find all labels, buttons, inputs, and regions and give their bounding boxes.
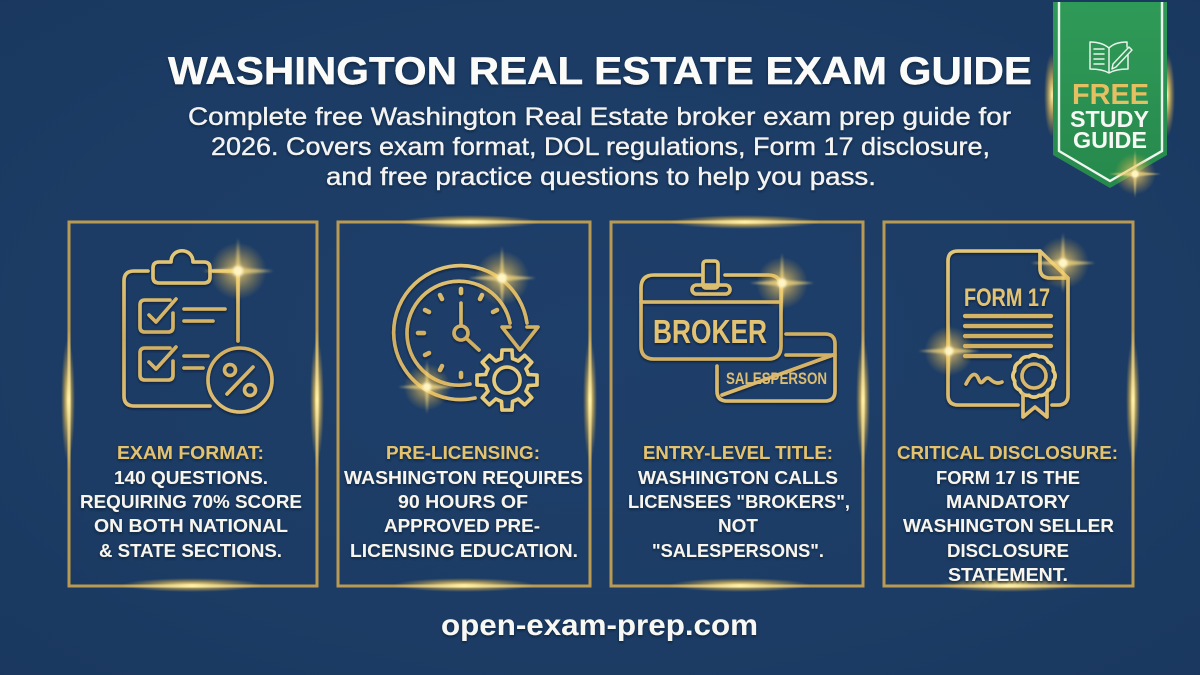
text: critical disclosure: DISCLOSURE bbox=[947, 540, 1069, 561]
subtitle bbox=[188, 103, 1011, 191]
text: pre-licensing: WASHINGTON REQUIRES bbox=[344, 467, 583, 488]
text: entry-level title: ENTRY-LEVEL TITLE: bbox=[643, 442, 833, 463]
text: pre-licensing bbox=[344, 442, 583, 561]
text: pre-licensing: APPROVED PRE- bbox=[384, 515, 540, 536]
badge: free study guide: GUIDE bbox=[1073, 127, 1147, 153]
text: entry-level title: NOT bbox=[718, 515, 759, 536]
footer url: open-exam-prep.com bbox=[441, 609, 758, 642]
panel: entry-level title bbox=[611, 215, 870, 592]
text: entry-level title: WASHINGTON CALLS bbox=[638, 467, 838, 488]
icon: clipboard with percent bbox=[124, 251, 272, 412]
icon: clock with arrow and gear bbox=[394, 266, 538, 410]
badge: free study guide: FREE bbox=[1072, 79, 1149, 111]
text: exam format: EXAM FORMAT: bbox=[117, 442, 264, 463]
text: critical disclosure: CRITICAL DISCLOSURE: bbox=[897, 442, 1118, 463]
text: critical disclosure: STATEMENT. bbox=[948, 564, 1068, 585]
icon: broker badge and struck salesperson card bbox=[641, 261, 835, 401]
title: WASHINGTON REAL ESTATE EXAM GUIDE bbox=[168, 50, 1032, 93]
badge: free study guide bbox=[1044, 2, 1175, 198]
text: exam format: 140 QUESTIONS. bbox=[114, 467, 268, 488]
panel: pre-licensing bbox=[338, 215, 597, 592]
panel: entry-level title: SALESPERSON bbox=[726, 369, 827, 388]
text: pre-licensing: PRE-LICENSING: bbox=[386, 442, 540, 463]
badge: free study guide: STUDY bbox=[1070, 106, 1149, 132]
text: exam format: ON BOTH NATIONAL bbox=[94, 515, 288, 536]
panel: critical disclosure: FORM 17 bbox=[964, 284, 1050, 312]
subtitle: Complete free Washington Real Estate broker exam prep guide for bbox=[188, 103, 1011, 131]
text: exam format: REQUIRING 70% SCORE bbox=[80, 491, 302, 512]
text: critical disclosure: MANDATORY bbox=[946, 491, 1071, 512]
text: exam format bbox=[80, 442, 302, 561]
icon: form 17 document with seal bbox=[948, 251, 1068, 417]
panel: exam format bbox=[61, 222, 324, 592]
text: critical disclosure bbox=[897, 442, 1118, 585]
text: pre-licensing: 90 HOURS OF bbox=[398, 491, 528, 512]
icon: open book and pencil bbox=[1090, 42, 1132, 73]
subtitle: 2026. Covers exam format, DOL regulations, Form 17 disclosure, bbox=[211, 133, 990, 161]
text: entry-level title: LICENSEES "BROKERS", bbox=[628, 491, 850, 512]
panel: critical disclosure bbox=[884, 222, 1140, 592]
text: pre-licensing: LICENSING EDUCATION. bbox=[350, 540, 578, 561]
text: entry-level title: "SALESPERSONS". bbox=[652, 540, 824, 561]
text: entry-level title bbox=[628, 442, 850, 561]
text: critical disclosure: FORM 17 IS THE bbox=[936, 467, 1080, 488]
panel: entry-level title: BROKER bbox=[653, 313, 767, 350]
text: exam format: & STATE SECTIONS. bbox=[99, 540, 282, 561]
subtitle: and free practice questions to help you pass. bbox=[326, 163, 876, 191]
text: critical disclosure: WASHINGTON SELLER bbox=[903, 515, 1114, 536]
